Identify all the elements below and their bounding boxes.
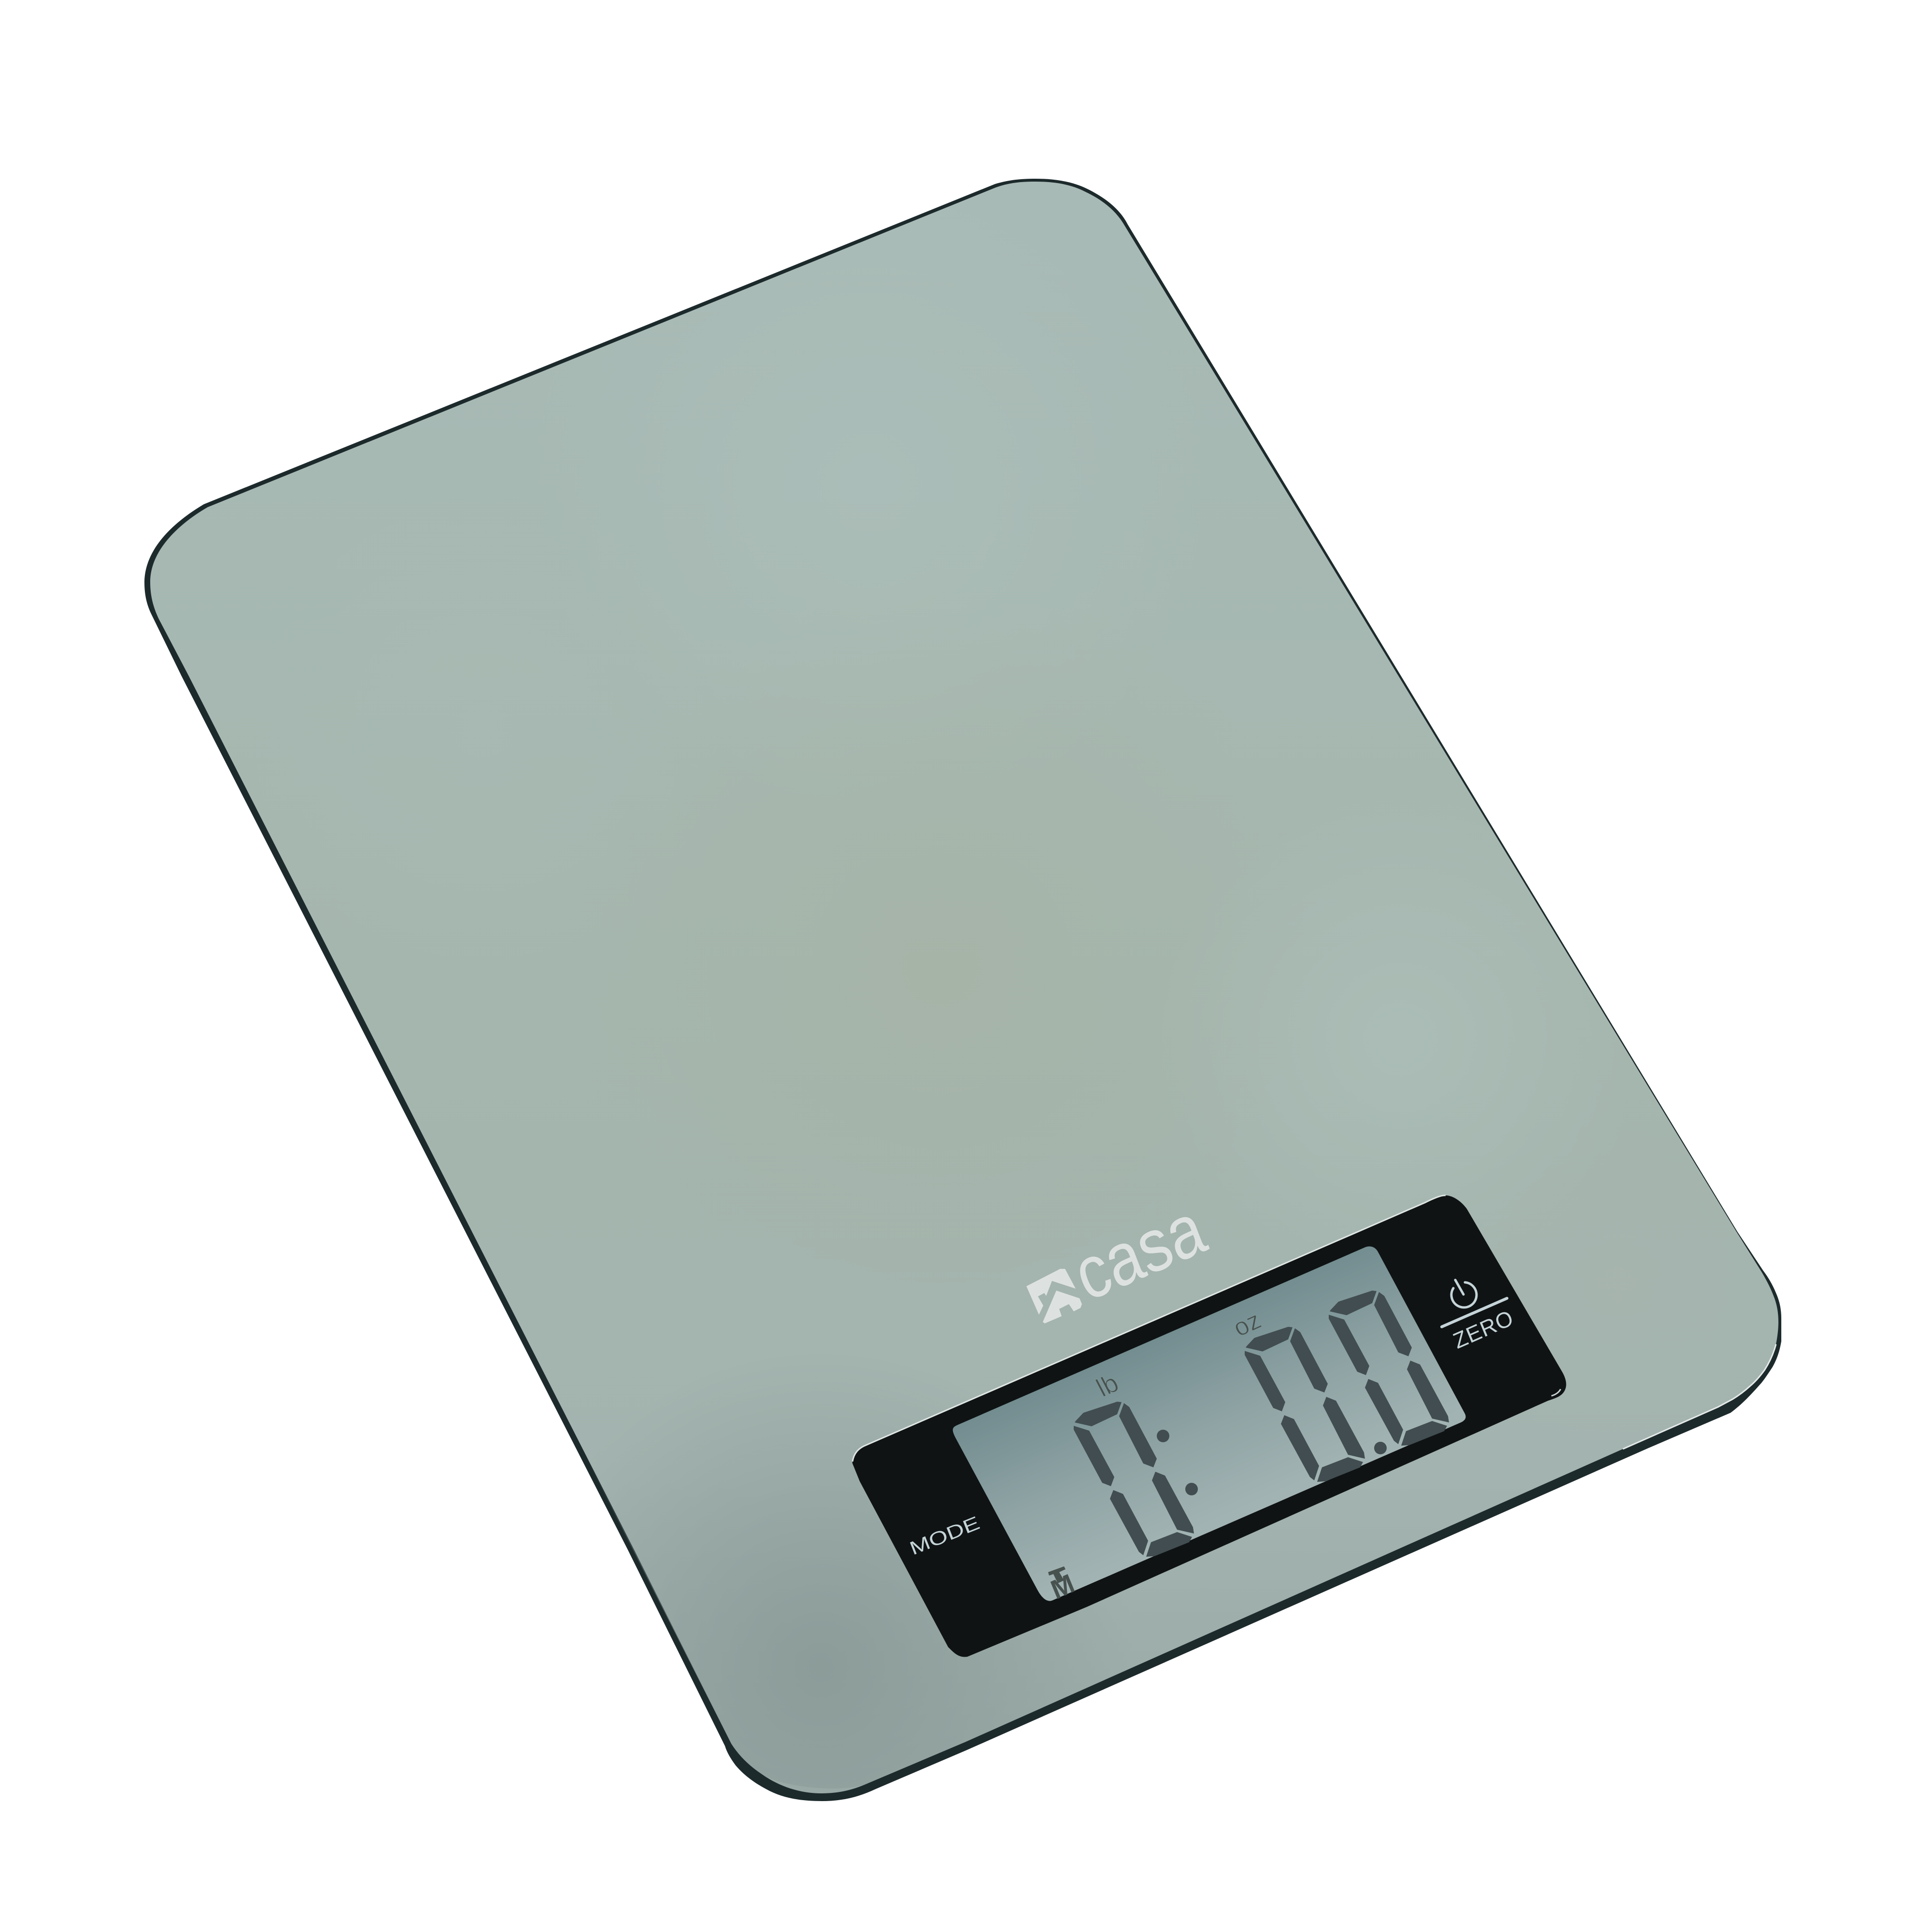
divider line xyxy=(1442,1298,1507,1327)
logo mark: house xyxy=(1026,1269,1082,1323)
LCD digit: ounces units xyxy=(1329,1291,1449,1446)
unit label: oz: oz xyxy=(1228,1306,1265,1342)
brand logo xyxy=(1026,1187,1216,1323)
LCD decimal point xyxy=(1374,1442,1387,1454)
display bezel xyxy=(852,1195,1566,1657)
logo wordmark: casa: casa xyxy=(1063,1187,1216,1317)
icon: power xyxy=(1451,1280,1477,1307)
scale base edge (dark rim) xyxy=(144,179,1781,1801)
button: power and zero xyxy=(1442,1280,1517,1353)
LCD colon xyxy=(1157,1430,1198,1495)
button label: MODE: MODE xyxy=(907,1512,982,1559)
LCD digit: ounces tens xyxy=(1245,1327,1365,1482)
unit label: lb: lb xyxy=(1092,1368,1123,1403)
LCD screen xyxy=(953,1246,1466,1601)
LCD weight-mode indicator: M xyxy=(1047,1568,1079,1605)
button label: ZERO: ZERO xyxy=(1449,1305,1517,1353)
LCD digit: pounds xyxy=(1074,1402,1194,1557)
stainless steel plate xyxy=(150,182,1778,1793)
